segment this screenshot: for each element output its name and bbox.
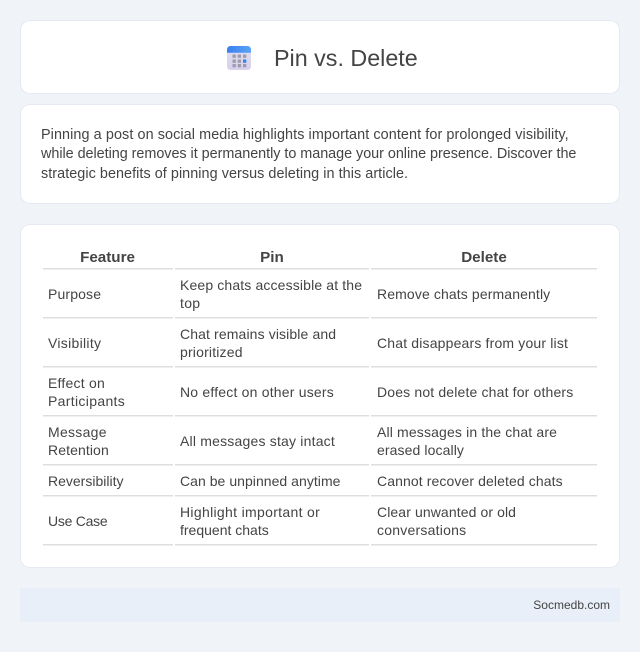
text: All messages stay intact: [180, 433, 335, 449]
row: Reversibility: Reversibility: [48, 473, 123, 489]
text: Cannot recover deleted chats: [377, 473, 563, 489]
text: Does not delete chat for others: [377, 384, 573, 400]
footer text: Socmedb.com: [533, 598, 610, 612]
panel: title card: [20, 20, 620, 94]
text: prioritized: [180, 344, 243, 360]
text: All messages in the chat are: [377, 424, 557, 440]
text: top: [180, 295, 200, 311]
table header: Pin: Pin: [260, 249, 284, 266]
footer bar: [20, 588, 620, 622]
text: Can be unpinned anytime: [180, 473, 340, 489]
row: Visibility: Visibility: [48, 335, 101, 351]
text: Chat disappears from your list: [377, 335, 568, 351]
row: Effect on Participants: Participants: [48, 393, 125, 409]
intro paragraph: strategic benefits of pinning versus deleting in this article.: [41, 166, 408, 182]
intro paragraph: [41, 127, 576, 182]
text: Highlight important or: [180, 504, 320, 520]
panel: comparison table: [20, 224, 620, 568]
text: Clear unwanted or old: [377, 504, 516, 520]
title: Pin vs. Delete: [274, 45, 418, 71]
text: conversations: [377, 522, 466, 538]
intro paragraph: Pinning a post on social media highlights important content for prolonged visibility,: [41, 127, 569, 143]
text: frequent chats: [180, 522, 269, 538]
row: Message Retention: [48, 424, 109, 458]
intro paragraph: while deleting removes it permanently to manage your online presence. Discover the: [41, 146, 576, 162]
table header: Feature: Feature: [80, 249, 135, 266]
icon: calendar: [227, 46, 251, 70]
row: Message Retention: Retention: [48, 442, 109, 458]
row: Use Case: Use Case: [48, 513, 107, 529]
row: Message Retention: Message: [48, 424, 107, 440]
text: Keep chats accessible at the: [180, 277, 362, 293]
text: No effect on other users: [180, 384, 334, 400]
text: erased locally: [377, 442, 464, 458]
row: Effect on Participants: [48, 375, 125, 409]
text: Remove chats permanently: [377, 286, 550, 302]
text: Chat remains visible and: [180, 326, 336, 342]
row: Effect on Participants: Effect on: [48, 375, 105, 391]
panel: intro text: [20, 104, 620, 204]
row: Purpose: Purpose: [48, 286, 101, 302]
table header: Delete: Delete: [461, 249, 507, 266]
